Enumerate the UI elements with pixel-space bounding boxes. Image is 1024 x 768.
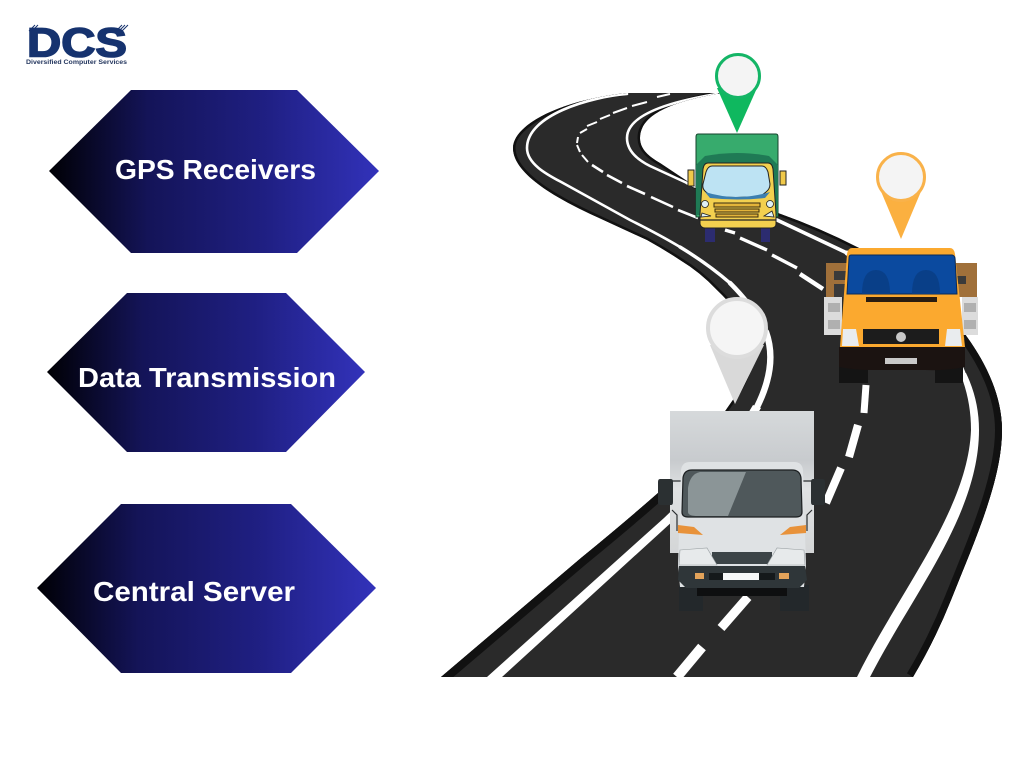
frame gaps (834, 271, 966, 297)
turn signals (678, 525, 806, 535)
grille (712, 552, 772, 564)
bumper (839, 347, 965, 370)
winding road (430, 85, 1010, 680)
licence plate (709, 573, 775, 580)
cab (678, 462, 806, 587)
grille (863, 329, 939, 344)
rear wooden frame (826, 263, 977, 297)
left lane line (527, 94, 770, 407)
logo tagline: Diversified Computer Services (26, 59, 128, 66)
windshield base (705, 192, 770, 200)
windshield highlight (688, 472, 746, 516)
underbody (697, 587, 787, 596)
orange truck (824, 248, 978, 383)
right lane line: near section (857, 373, 979, 677)
wheels (705, 228, 770, 242)
road surface (430, 85, 1010, 680)
hood vent (866, 297, 937, 302)
left lane line: near section (487, 405, 761, 677)
hexagon: Central Server (37, 504, 376, 673)
seats (862, 270, 940, 294)
cab (700, 163, 776, 228)
road edge shading (441, 93, 1002, 677)
pin: green (716, 54, 760, 133)
bumper (678, 566, 807, 588)
grille (714, 203, 760, 217)
cargo box (696, 134, 778, 217)
logo: DCS (26, 20, 128, 66)
logo lettering: DCS (27, 20, 127, 66)
white truck (658, 411, 825, 611)
hexagon: GPS Receivers: GPS Receivers (115, 154, 316, 185)
bed panels (828, 303, 976, 329)
pin: grey (708, 299, 766, 404)
centre dashed line (577, 94, 866, 677)
cab (840, 248, 965, 347)
bumper line (700, 219, 776, 221)
headlights (679, 548, 805, 565)
mirror arms (668, 481, 816, 531)
hexagon: Central Server: Central Server (93, 576, 295, 607)
wheels (839, 365, 963, 383)
hexagon: Data Transmission: Data Transmission (78, 362, 336, 393)
logo hatch marks (29, 25, 128, 31)
green truck (688, 134, 786, 242)
box front shading (696, 153, 778, 215)
truck bed (824, 297, 978, 335)
wheels (679, 585, 809, 611)
fog lights (695, 573, 789, 579)
cargo box (670, 411, 814, 553)
licence plate (885, 358, 917, 364)
mirrors (688, 170, 786, 186)
windshield (847, 255, 957, 294)
pin: orange (878, 154, 924, 239)
headlights (701, 200, 774, 217)
mirrors (658, 479, 825, 505)
badge (896, 332, 906, 342)
hexagon: GPS Receivers (49, 90, 379, 253)
hexagon: Data Transmission (47, 293, 365, 452)
windshield (682, 470, 802, 517)
headlights (842, 329, 962, 346)
windshield (703, 166, 770, 198)
right lane line (627, 94, 963, 373)
